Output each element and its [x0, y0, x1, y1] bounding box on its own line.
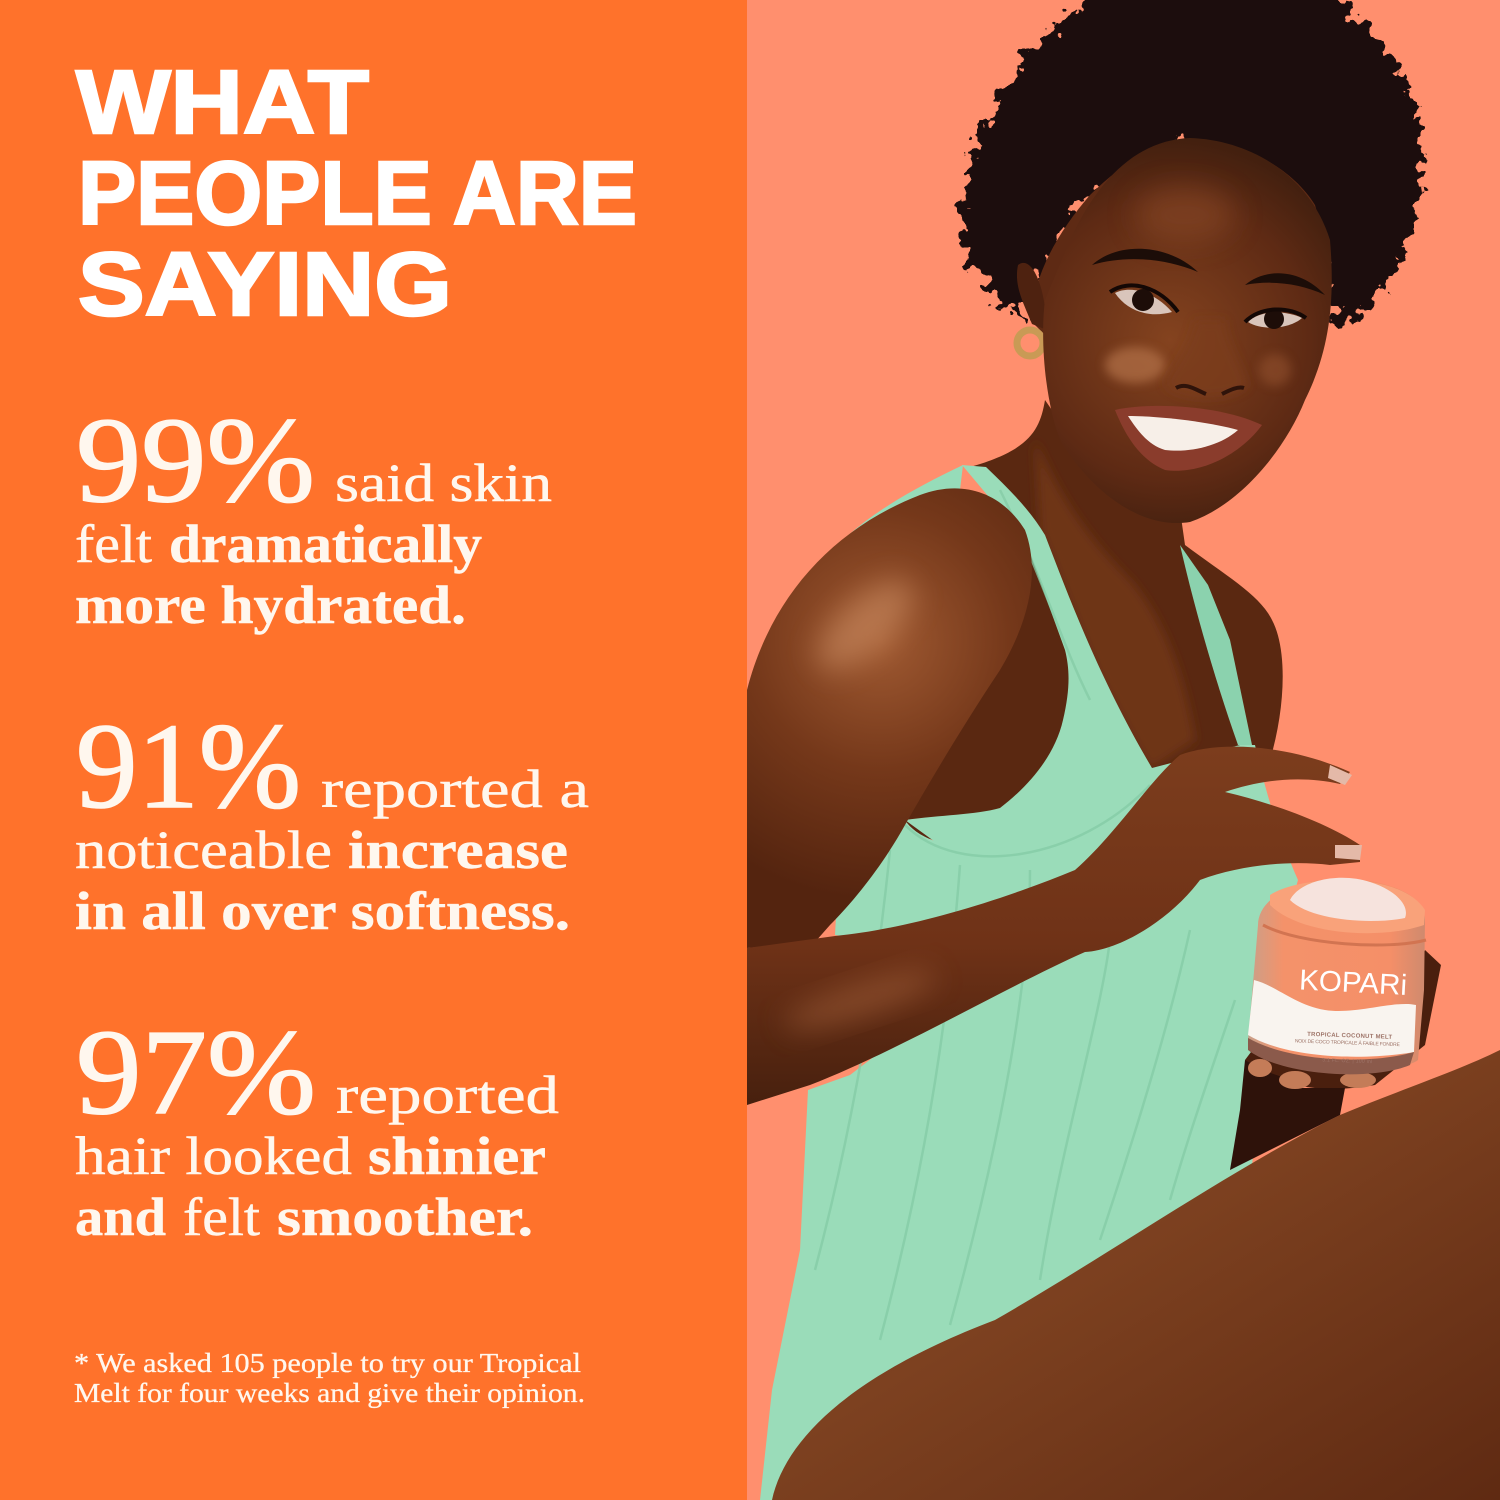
- face: [1043, 138, 1332, 523]
- stat: 97 percent hair: [75, 1005, 559, 1247]
- cheek highlights: [1105, 347, 1165, 383]
- ear and earring: [1017, 263, 1047, 356]
- stat: 97 percent hair: and: [75, 1187, 166, 1247]
- jar: label text: 3.1 FL. OZ. | 100 ml: [1322, 1057, 1372, 1065]
- fingernails: [1328, 765, 1362, 860]
- jar: label text: [1294, 1031, 1401, 1066]
- swimsuit: body: [760, 745, 1298, 1500]
- fingertips: [1248, 1059, 1376, 1089]
- stat: 99 percent hydrated: felt: [75, 514, 152, 574]
- lips: [1115, 406, 1262, 471]
- hair: [960, 0, 1424, 328]
- forehead cover: [1030, 140, 1328, 340]
- stat: 97 percent hair: felt: [183, 1187, 260, 1247]
- stat: 99 percent hydrated: more hydrated.: [75, 575, 466, 635]
- footnote: [74, 1348, 585, 1408]
- jar: label text: TROPICAL COCONUT MELT: [1307, 1032, 1393, 1041]
- swimsuit: front strap: [905, 465, 1160, 860]
- mouth interior and teeth: [1128, 416, 1238, 451]
- stat: 91 percent softness: [75, 699, 589, 941]
- stat: 91 percent softness: in all over softness.: [75, 881, 570, 941]
- stat: 97 percent hair: shinier: [368, 1126, 546, 1186]
- swimsuit: ribbing: [815, 490, 1235, 1340]
- stat: 97 percent hair: reported: [336, 1065, 559, 1125]
- swimsuit: [760, 465, 1298, 1500]
- swimsuit: far strap: [1180, 545, 1252, 745]
- nose: [1165, 320, 1248, 398]
- footnote: Melt for four weeks and give their opinion.: [74, 1378, 585, 1408]
- stat: 91 percent softness: 91%: [76, 699, 301, 834]
- forehead highlight: [1135, 187, 1235, 243]
- jar hand underside: [1245, 950, 1441, 1089]
- stat: 91 percent softness: reported a: [321, 759, 589, 819]
- eyebrows: [1092, 249, 1325, 295]
- stat: 99 percent hydrated: dramatically: [169, 514, 482, 574]
- chest light: [1035, 440, 1195, 770]
- stat: 97 percent hair: hair looked: [75, 1126, 352, 1186]
- title: WHAT: [76, 53, 369, 153]
- footnote: * We asked 105 people to try our Tropical: [74, 1348, 581, 1378]
- title: PEOPLE ARE: [78, 144, 637, 244]
- jar: label text: NOIX DE COCO TROPICALE À FAIBLE FONDRE: [1295, 1037, 1401, 1048]
- forearm sheen: [779, 960, 941, 1040]
- panel: orange text column: [0, 0, 747, 1500]
- stat: 99 percent hydrated: said skin: [335, 453, 552, 513]
- shoulder highlight: [803, 566, 927, 684]
- stat: 99 percent hydrated: [75, 393, 552, 635]
- background: photo panel: [747, 0, 1500, 1500]
- thigh: [772, 1050, 1500, 1500]
- title: [76, 53, 637, 335]
- nostrils: [1176, 386, 1244, 394]
- jar: [1248, 878, 1426, 1074]
- eyes: [1115, 290, 1172, 314]
- title: SAYING: [78, 235, 452, 335]
- forearm and hand: [747, 747, 1360, 1105]
- torso skin: neck, chest and far shoulder: [900, 400, 1283, 860]
- jar: logo: KOPARi: [1298, 964, 1408, 1002]
- palm shadow: [1230, 1060, 1345, 1170]
- upper arm: [747, 488, 1032, 948]
- stat: 99 percent hydrated: 99%: [76, 393, 315, 528]
- stat: 97 percent hair: 97%: [76, 1005, 316, 1140]
- stat: 91 percent softness: noticeable: [75, 820, 332, 880]
- swimsuit: back strap: [818, 465, 963, 568]
- stat: 91 percent softness: increase: [348, 820, 568, 880]
- stat: 97 percent hair: smoother.: [277, 1187, 533, 1247]
- photo: woman holding jar: [747, 0, 1500, 1500]
